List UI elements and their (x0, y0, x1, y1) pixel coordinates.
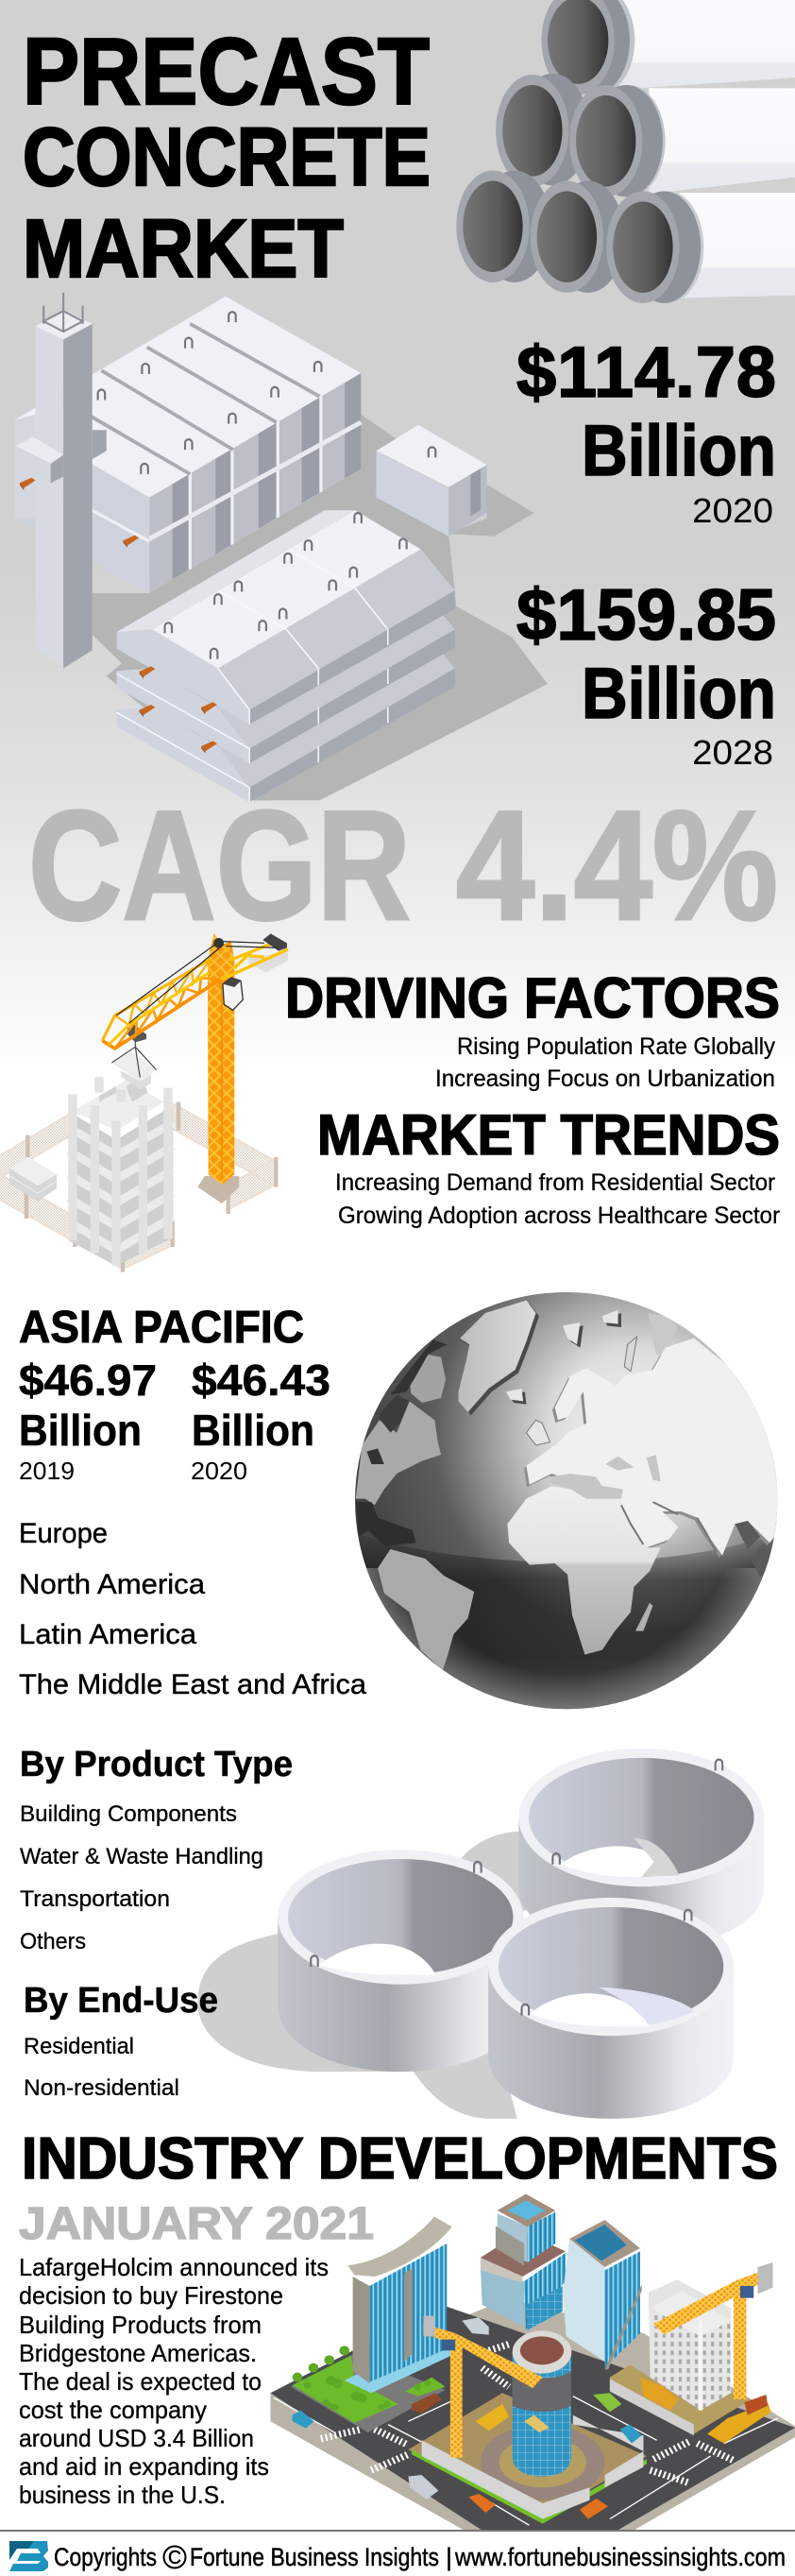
regional stats: Asia Pacific: 2019 (19, 1457, 75, 1485)
curved-roof tower (345, 2217, 452, 2393)
Greenland (459, 1301, 536, 1412)
Central America and Caribbean (356, 1502, 415, 1546)
stat: 2020 market size: $114.78 (516, 333, 776, 413)
heading and list: by end-use: Non-residential (24, 2075, 179, 2101)
heading and list: by end-use (24, 1981, 218, 2101)
regional stats: Asia Pacific: 2020 (191, 1457, 247, 1485)
heading and list: by product type: Water & Waste Handling (20, 1844, 263, 1869)
title: MARKET (23, 203, 344, 295)
regional stats: Asia Pacific: $46.43 (192, 1356, 330, 1405)
paragraph: LafargeHolcim deal: LafargeHolcim announced its (19, 2253, 329, 2281)
lower stack of roof slabs (117, 510, 455, 802)
Europe and Asia (526, 1339, 779, 1556)
stat: 2020 market size: 2020 (692, 491, 773, 530)
South America (378, 1549, 474, 1670)
Arctic islands (506, 1310, 618, 1401)
Madagascar (635, 1603, 652, 1631)
list of other regions (19, 1518, 366, 1700)
background gradient (0, 0, 795, 1134)
title: CONCRETE (23, 111, 431, 203)
regional stats: Asia Pacific: ASIA PACIFIC (19, 1303, 304, 1353)
left tower crane (423, 2316, 543, 2458)
ground shadows (93, 415, 548, 800)
concrete column with rebar (15, 293, 107, 669)
stat: 2028 market size: 2028 (692, 733, 773, 772)
illustration: precast concrete blocks and column (15, 293, 548, 802)
title: PRECAST (23, 19, 430, 125)
construction vehicles and bricks (640, 2378, 771, 2444)
Southeast Asia (735, 1521, 773, 1578)
illustration: globe (349, 1292, 784, 1713)
title (23, 19, 431, 295)
driving factors: Increasing Focus on Urbanization (435, 1066, 775, 1092)
North America (356, 1401, 441, 1505)
paragraph: LafargeHolcim deal: around USD 3.4 Billion (19, 2424, 254, 2452)
heading: industry developments: INDUSTRY DEVELOPMENTS (22, 2126, 778, 2192)
footer copyright text: Fortune Business Insights (190, 2543, 439, 2571)
CAGR headline (28, 778, 778, 952)
market trends: Growing Adoption across Healthcare Sector (338, 1203, 780, 1229)
under-construction white building (649, 2279, 731, 2411)
heading and list: by product type: Others (20, 1929, 86, 1954)
illustration: stacked concrete pipes (456, 0, 795, 303)
footer copyright text: Copyrights (54, 2543, 157, 2571)
stepped glass tower (481, 2194, 566, 2330)
heading and list: by product type: Building Components (20, 1801, 237, 1827)
stat: 2028 market size: $159.85 (516, 575, 776, 656)
paragraph: LafargeHolcim deal: The deal is expected to (19, 2367, 262, 2396)
list of other regions: North America (19, 1569, 205, 1600)
stat: 2028 market size (516, 575, 776, 772)
illustration: tower crane and building under construction (0, 933, 288, 1272)
driving factors: DRIVING FACTORS (285, 966, 780, 1030)
heading and list: by end-use: By End-Use (24, 1981, 218, 2021)
center construction site (408, 2393, 647, 2524)
paragraph: LafargeHolcim deal (19, 2253, 329, 2509)
paragraph: LafargeHolcim deal: and aid in expanding its (19, 2452, 269, 2481)
Africa (507, 1486, 661, 1655)
illustration: isometric city and construction site (270, 2194, 795, 2544)
crane (102, 933, 288, 1203)
crane load (111, 1025, 157, 1089)
left ring (278, 1850, 523, 2072)
driving factors (285, 966, 780, 1092)
front ring (488, 1898, 734, 2119)
cylindrical tower (513, 2330, 571, 2477)
building frame (69, 1077, 173, 1266)
market trends: Increasing Demand from Residential Sector (335, 1169, 775, 1196)
heading and list: by product type: Transportation (20, 1886, 170, 1912)
material stack (9, 1157, 57, 1202)
inland seas (549, 1455, 661, 1499)
footer logo (9, 2541, 48, 2571)
lower rim highlight (366, 1568, 766, 1710)
stat: 2020 market size: Billion (582, 411, 776, 491)
heading and list: by end-use: Residential (24, 2034, 134, 2059)
construction yard right (610, 2364, 751, 2435)
southern hemisphere shading (349, 1530, 784, 1713)
footer copyright text (54, 2543, 786, 2571)
stat: 2028 market size: Billion (582, 654, 776, 734)
CAGR headline: CAGR (28, 778, 411, 952)
regional stats: Asia Pacific (19, 1303, 330, 1485)
heading and list: by product type (20, 1745, 293, 1954)
back ring (518, 1749, 764, 1948)
market trends (317, 1103, 780, 1229)
regional stats: Asia Pacific: Billion (19, 1406, 142, 1455)
jib truss (102, 959, 220, 1049)
paragraph: LafargeHolcim deal: decision to buy Firestone (19, 2281, 283, 2310)
counter jib (248, 952, 288, 972)
list of other regions: Europe (19, 1518, 108, 1549)
solar roof tower (563, 2220, 642, 2369)
left park block (291, 2346, 446, 2432)
paragraph: LafargeHolcim deal: business in the U.S. (19, 2481, 226, 2509)
small single block (376, 425, 487, 537)
British Isles (526, 1420, 550, 1445)
construction fence (0, 1102, 276, 1272)
footer rule (0, 2530, 795, 2532)
continent shadows (462, 1304, 621, 1415)
list of other regions: The Middle East and Africa (19, 1669, 366, 1700)
stat: 2020 market size (516, 333, 776, 530)
footer copyright text: C (168, 2548, 181, 2568)
footer copyright text: | (446, 2543, 452, 2571)
regional stats: Asia Pacific: $46.97 (19, 1356, 157, 1405)
heading and list: by product type: By Product Type (20, 1745, 293, 1784)
date: January 2021: JANUARY 2021 (19, 2199, 374, 2249)
paragraph: LafargeHolcim deal: Building Products from (19, 2311, 262, 2339)
right tower crane (653, 2262, 773, 2399)
paragraph: LafargeHolcim deal: cost the company (19, 2396, 207, 2424)
regional stats: Asia Pacific: Billion (192, 1406, 314, 1455)
driving factors: Rising Population Rate Globally (457, 1033, 775, 1060)
back block stack (15, 297, 361, 593)
street base (270, 2298, 795, 2544)
paragraph: LafargeHolcim deal: Bridgestone Americas. (19, 2339, 257, 2367)
market trends: MARKET TRENDS (317, 1103, 780, 1167)
ring shadows (197, 1832, 533, 2119)
list of other regions: Latin America (19, 1619, 196, 1650)
illustration: concrete rings (197, 1749, 764, 2119)
vehicles (293, 2317, 642, 2519)
